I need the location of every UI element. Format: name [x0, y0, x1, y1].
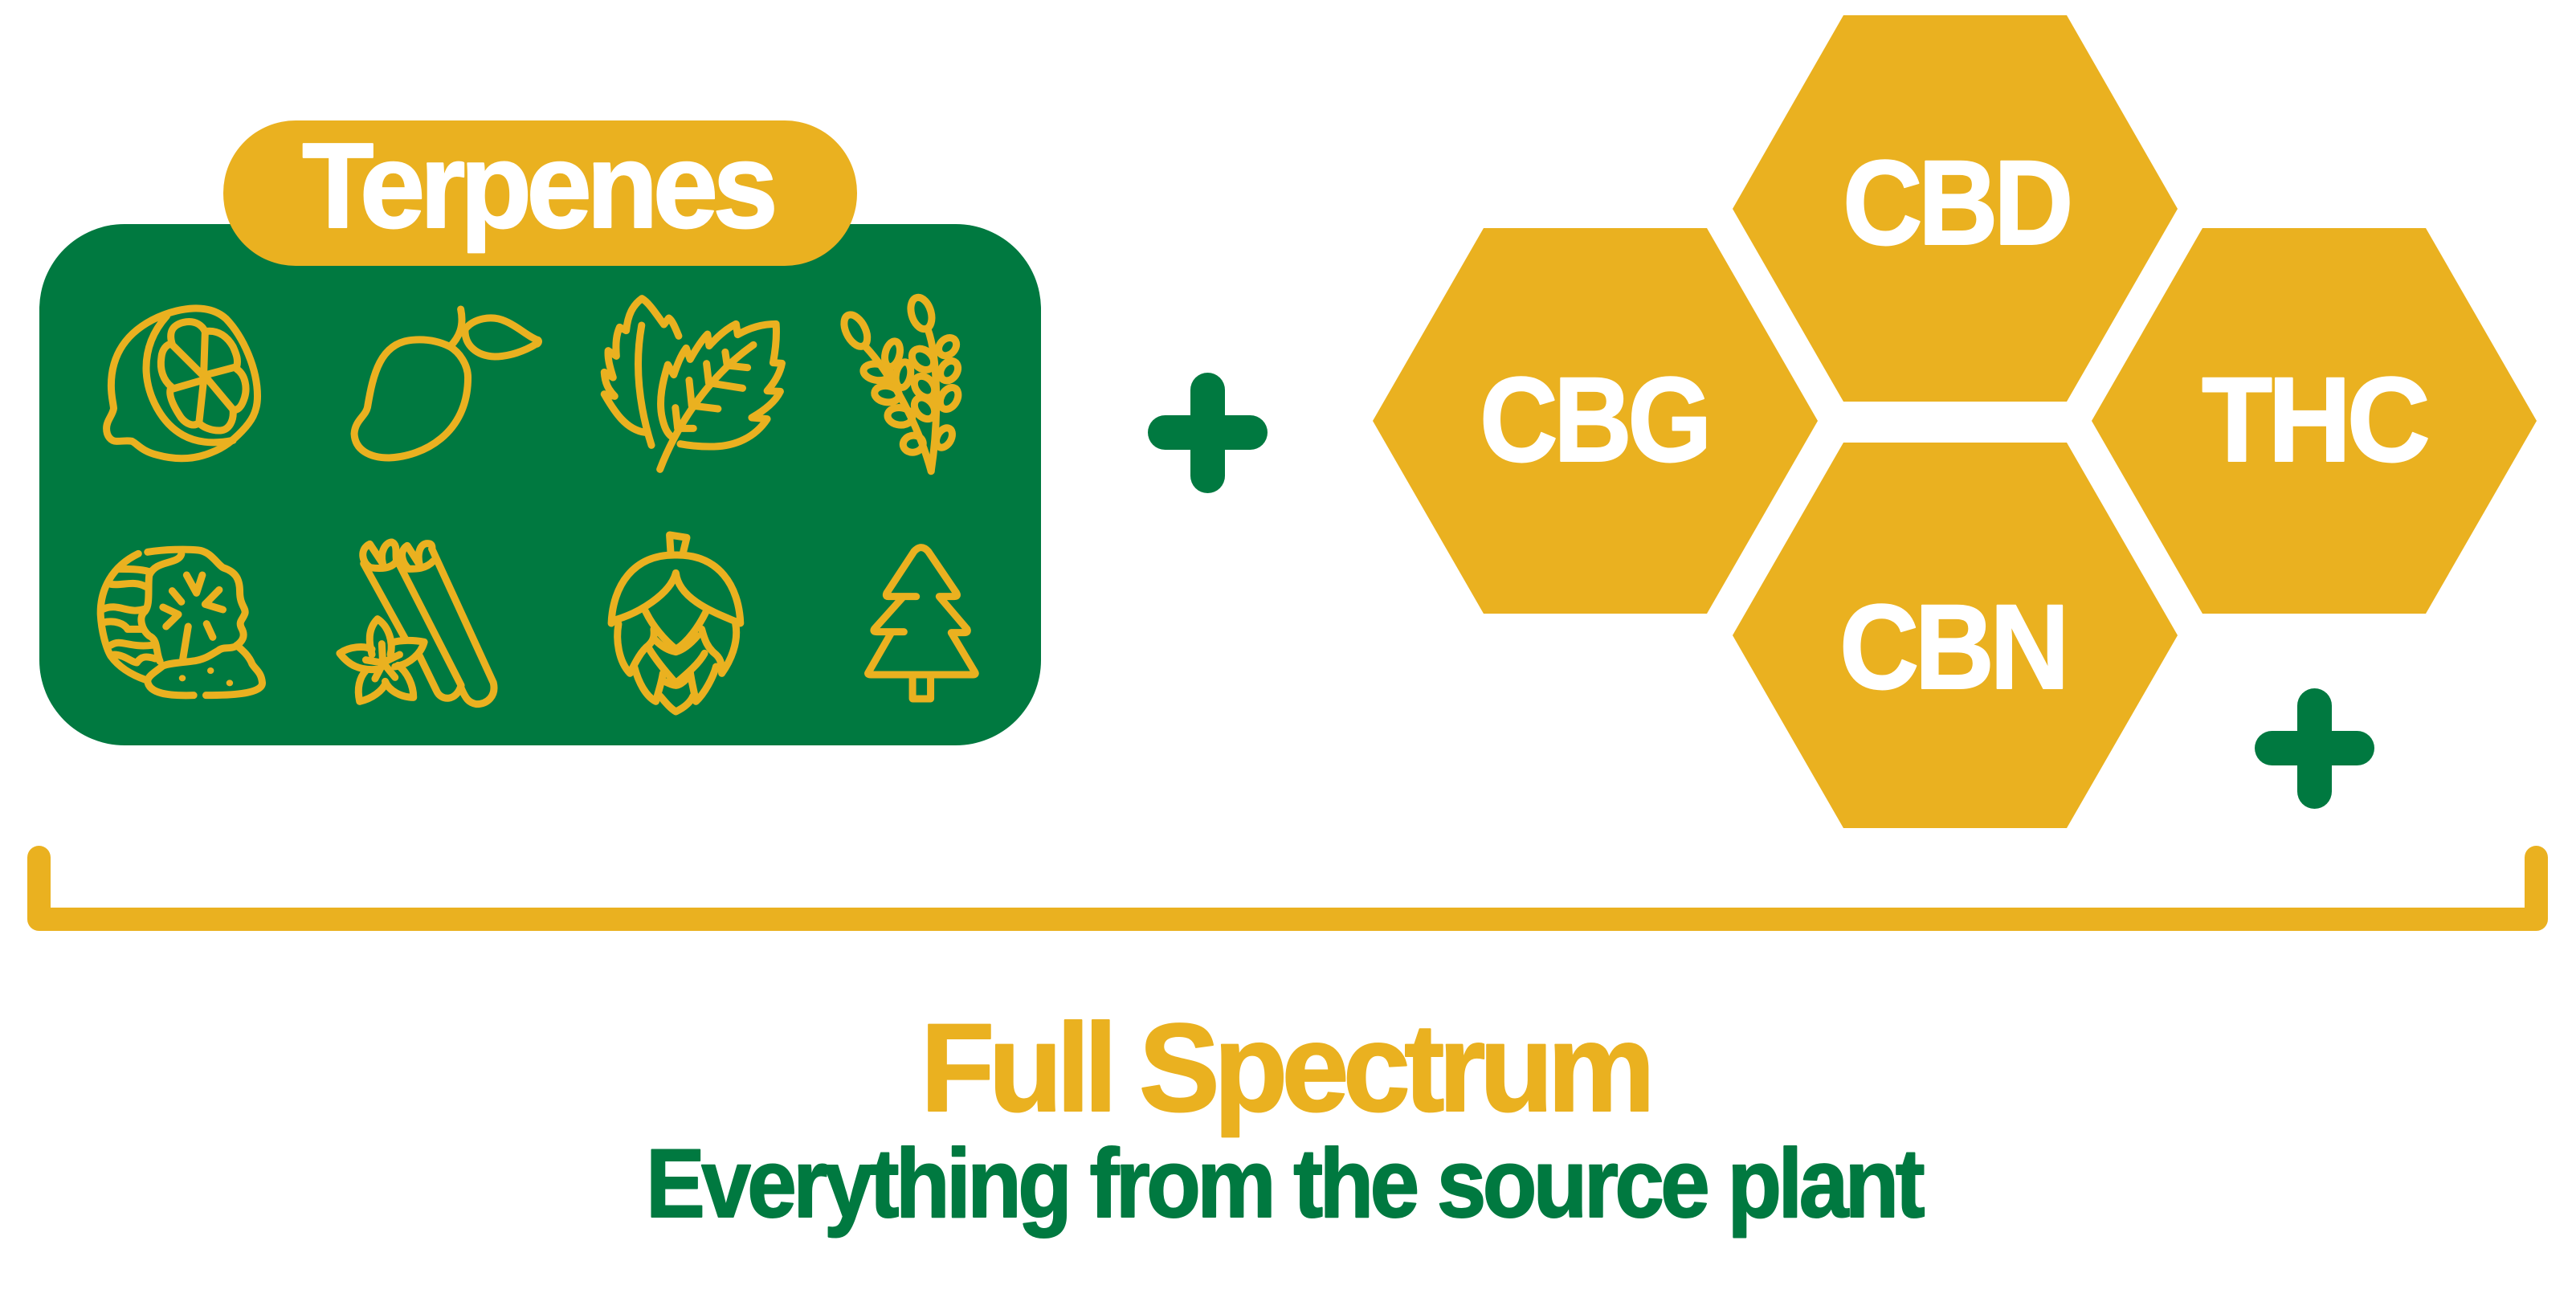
title: Full Spectrum: Full Spectrum: [921, 998, 1649, 1138]
subtitle: Everything from the source plant: [646, 1128, 1925, 1238]
icon: ginger root: [100, 549, 262, 696]
plus sign: terpenes and cannabinoids: [1148, 373, 1268, 493]
icon: mint leaves: [604, 299, 782, 469]
hexagon: CBN: CBN: [1839, 579, 2065, 714]
hexagon: CBD: [1733, 15, 2178, 402]
hexagon: THC: THC: [2202, 352, 2428, 487]
icon: hop cone: [611, 535, 741, 712]
heading pill: Terpenes: Terpenes: [302, 117, 774, 253]
icon: lemon: [107, 308, 258, 459]
hexagon: THC: [2092, 228, 2537, 614]
plus sign: additional cannabinoids: [2255, 688, 2374, 809]
bracket: [39, 858, 2537, 919]
panel background: [39, 224, 1041, 745]
icon: mango: [354, 309, 539, 458]
panel: terpenes: [39, 117, 1041, 745]
hexagon: CBD: CBD: [1843, 135, 2070, 270]
icon: pine tree: [868, 548, 975, 699]
hexagon: CBG: CBG: [1480, 352, 1708, 487]
icon: herb sprig: [839, 296, 961, 471]
hexagon: CBG: [1373, 228, 1818, 614]
heading pill: Terpenes: [223, 117, 857, 266]
hexagon: CBN: [1733, 443, 2178, 828]
icon: cinnamon and star anise: [340, 542, 494, 704]
